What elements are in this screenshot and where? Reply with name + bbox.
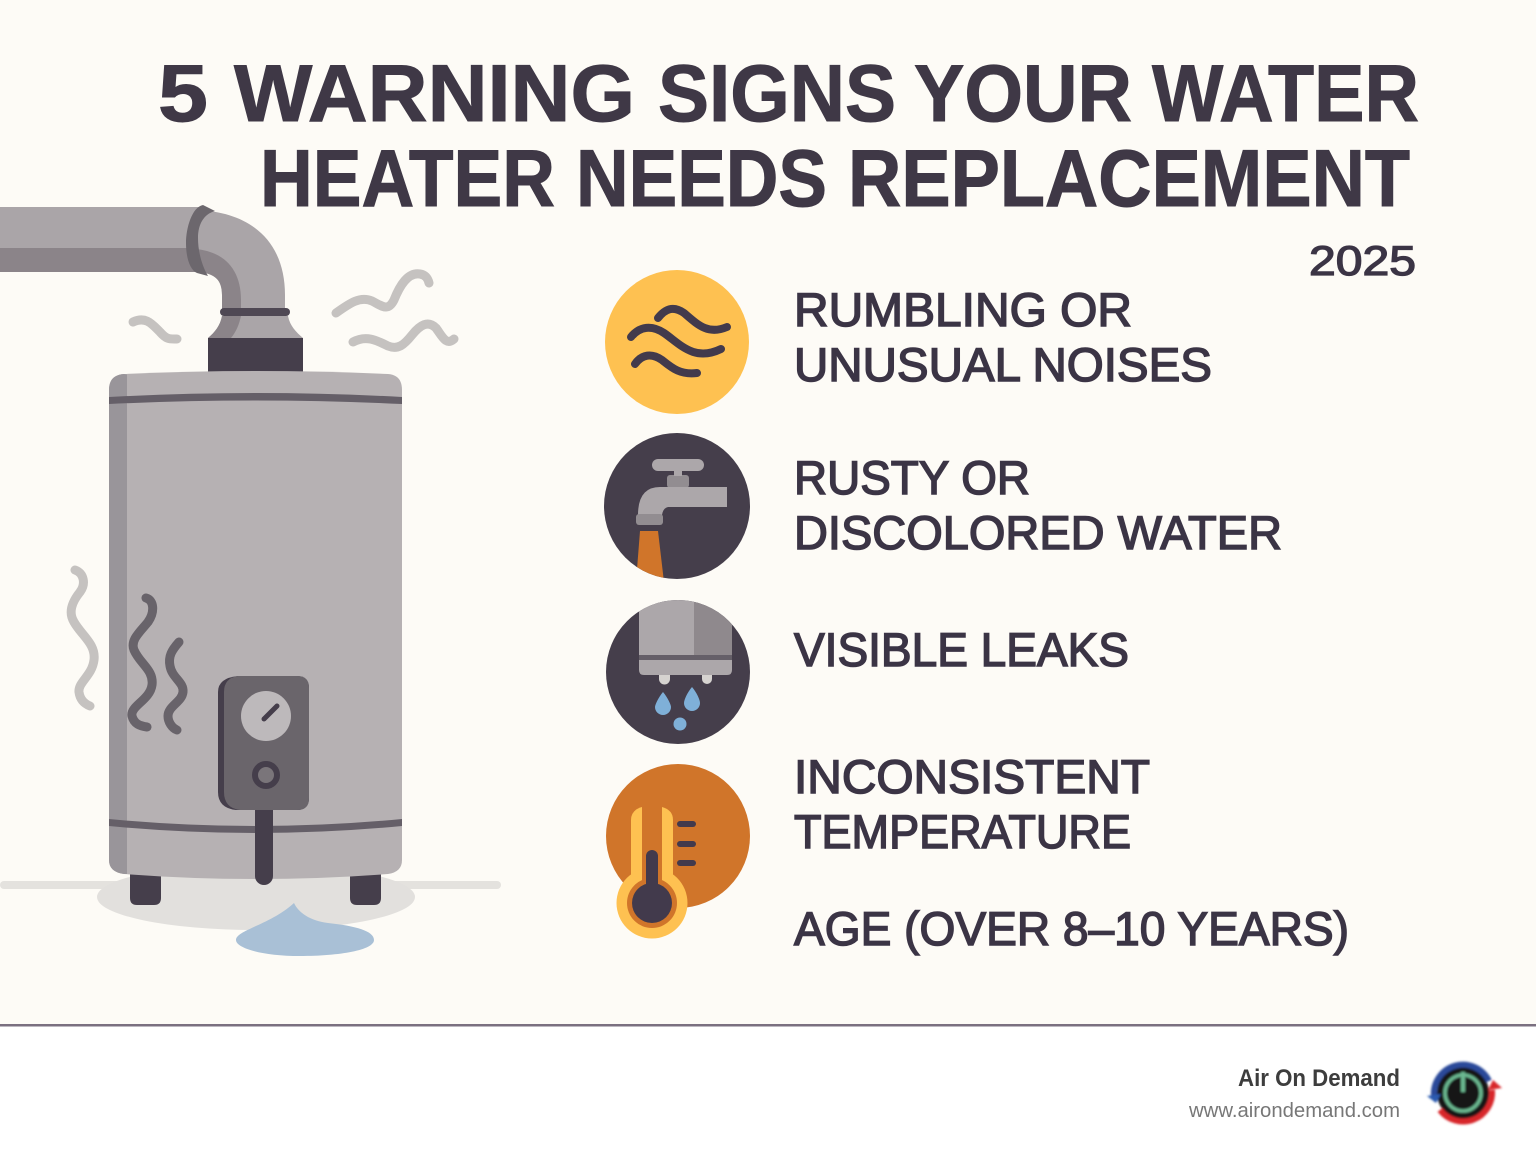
year label: 2025 [1309, 237, 1416, 284]
water puddle [236, 903, 374, 956]
floor line [0, 881, 501, 889]
title: HEATER [260, 134, 555, 224]
title: YOUR [914, 49, 1132, 139]
text: age over 8-10 years: AGE (OVER 8–10 YEARS) [794, 903, 1349, 956]
text: inconsistent temperature [794, 751, 1150, 859]
title: WATER [1152, 49, 1419, 139]
title: REPLACEMENT [848, 134, 1410, 224]
title: 5 [158, 49, 208, 139]
text: rumbling or unusual noises [794, 284, 1212, 392]
control panel [218, 676, 309, 885]
text: rusty or discolored water: RUSTY OR [794, 452, 1030, 505]
icon: leaking tank [606, 590, 750, 744]
floor shadow [97, 864, 415, 930]
text: rusty or discolored water: DISCOLORED WATER [794, 507, 1282, 560]
icon: thermometer [606, 764, 750, 938]
text: inconsistent temperature: TEMPERATURE [794, 806, 1131, 859]
brand name: Air On Demand [1238, 1065, 1400, 1092]
text: inconsistent temperature: INCONSISTENT [794, 751, 1150, 804]
text: rumbling or unusual noises: RUMBLING OR [794, 284, 1132, 337]
logo [1427, 1065, 1502, 1121]
title: WARNING [234, 49, 635, 139]
exhaust pipe [0, 205, 303, 372]
tank body [109, 371, 402, 879]
icon: faucet with rusty water [604, 433, 750, 582]
tank legs [130, 870, 381, 905]
title: SIGNS [658, 49, 896, 139]
title [158, 49, 1419, 224]
text: rusty or discolored water [794, 452, 1282, 560]
steam lines [71, 274, 454, 730]
website: www.airondemand.com [1188, 1100, 1400, 1122]
icon: rumbling noise waves [605, 270, 749, 414]
footer [0, 1024, 1536, 1154]
title: NEEDS [576, 134, 827, 224]
text: visible leaks: VISIBLE LEAKS [794, 624, 1129, 677]
illustration: water heater [0, 205, 501, 956]
text: rumbling or unusual noises: UNUSUAL NOISES [794, 339, 1212, 392]
